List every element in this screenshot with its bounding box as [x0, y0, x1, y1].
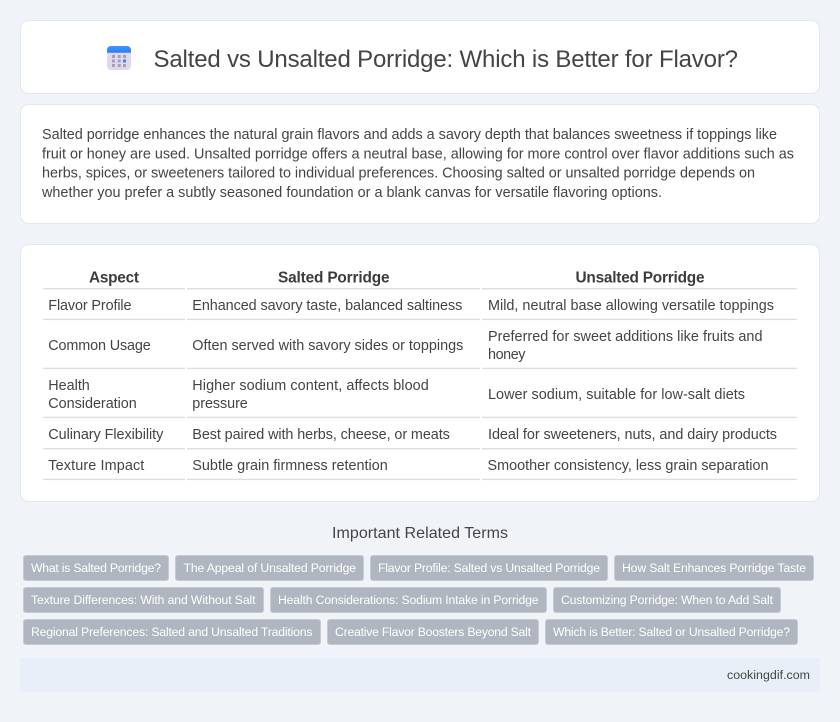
- tag: Regional Preferences: Salted and Unsalted Traditions: [31, 625, 312, 639]
- tag: How Salt Enhances Porridge Taste: [622, 561, 806, 575]
- tag: Flavor Profile: Salted vs Unsalted Porridge: [378, 561, 600, 575]
- tag: Which is Better: Salted or Unsalted Porridge?: [553, 625, 790, 639]
- row: common usage: [48, 329, 763, 363]
- tag: [270, 588, 546, 612]
- tag: What is Salted Porridge?: [31, 561, 161, 575]
- title: Salted vs Unsalted Porridge: Which is Better for Flavor?: [154, 46, 738, 73]
- text block: summary paragraph: fruit or honey are used. Unsalted porridge offers a neutral base, allowing for more control over flavor additions such as: [42, 146, 794, 162]
- panel: header: [20, 20, 820, 94]
- row: common usage: Common Usage: [48, 338, 151, 354]
- tag: [24, 620, 320, 644]
- row: culinary flexibility: Best paired with herbs, cheese, or meats: [192, 427, 450, 443]
- row: culinary flexibility: Culinary Flexibility: [48, 427, 164, 443]
- text block: summary paragraph: whether you prefer a subtly seasoned foundation or a blank canvas for versatile flavoring options.: [41, 185, 662, 201]
- text block: summary paragraph: herbs, spices, or sweeteners tailored to individual preferences. Choosing salted or unsalted porridge depends on: [42, 166, 755, 182]
- heading: related terms: Important Related Terms: [332, 525, 508, 542]
- row: texture impact: Texture Impact: [48, 458, 144, 474]
- row: texture impact: Smoother consistency, less grain separation: [488, 458, 768, 474]
- row: flavor profile: Mild, neutral base allowing versatile toppings: [488, 298, 774, 314]
- tag: [176, 556, 364, 580]
- footer source text: cookingdif.com: [727, 668, 810, 682]
- row: health consideration: Health: [48, 378, 90, 394]
- icon: calendar: [107, 46, 131, 70]
- row: health consideration: Consideration: [48, 396, 137, 412]
- row: flavor profile: [48, 298, 774, 314]
- tag: [24, 556, 168, 580]
- row: health consideration: Higher sodium content, affects blood: [192, 378, 429, 394]
- tag list: related terms: [24, 556, 814, 644]
- row: texture impact: [48, 458, 769, 474]
- tag: Creative Flavor Boosters Beyond Salt: [335, 625, 532, 639]
- table header row: Salted Porridge: [278, 270, 390, 286]
- row: common usage: Preferred for sweet additions like fruits and: [488, 329, 762, 345]
- tag: [328, 620, 538, 644]
- tag: Health Considerations: Sodium Intake in Porridge: [278, 593, 539, 607]
- tag: [24, 588, 264, 612]
- tag: [546, 620, 798, 644]
- row: texture impact: Subtle grain firmness retention: [192, 458, 388, 474]
- row: health consideration: pressure: [192, 396, 248, 412]
- tag: [614, 556, 814, 580]
- row: health consideration: Lower sodium, suitable for low-salt diets: [488, 387, 745, 403]
- row: common usage: Often served with savory sides or toppings: [192, 338, 463, 354]
- tag: [370, 556, 608, 580]
- row: health consideration: [48, 378, 745, 412]
- table header row: Unsalted Porridge: [576, 270, 705, 286]
- row: common usage: honey: [488, 347, 526, 363]
- row: culinary flexibility: Ideal for sweeteners, nuts, and dairy products: [488, 427, 777, 443]
- row: flavor profile: Flavor Profile: [48, 298, 131, 314]
- table header row: Aspect: [89, 270, 139, 286]
- tag: Texture Differences: With and Without Salt: [31, 593, 256, 607]
- tag: The Appeal of Unsalted Porridge: [184, 561, 356, 575]
- text block: summary paragraph: Salted porridge enhances the natural grain flavors and adds a savory depth that balances sweetness if toppings like: [42, 127, 777, 143]
- row: flavor profile: Enhanced savory taste, balanced saltiness: [192, 298, 462, 314]
- tag: Customizing Porridge: When to Add Salt: [561, 593, 774, 607]
- panel: comparison table: [20, 244, 820, 502]
- table header row: [89, 270, 705, 286]
- panel: summary: [20, 104, 820, 224]
- tag: [554, 588, 780, 612]
- text block: summary paragraph: [41, 127, 794, 201]
- footer: [20, 658, 820, 692]
- row: culinary flexibility: [48, 427, 777, 443]
